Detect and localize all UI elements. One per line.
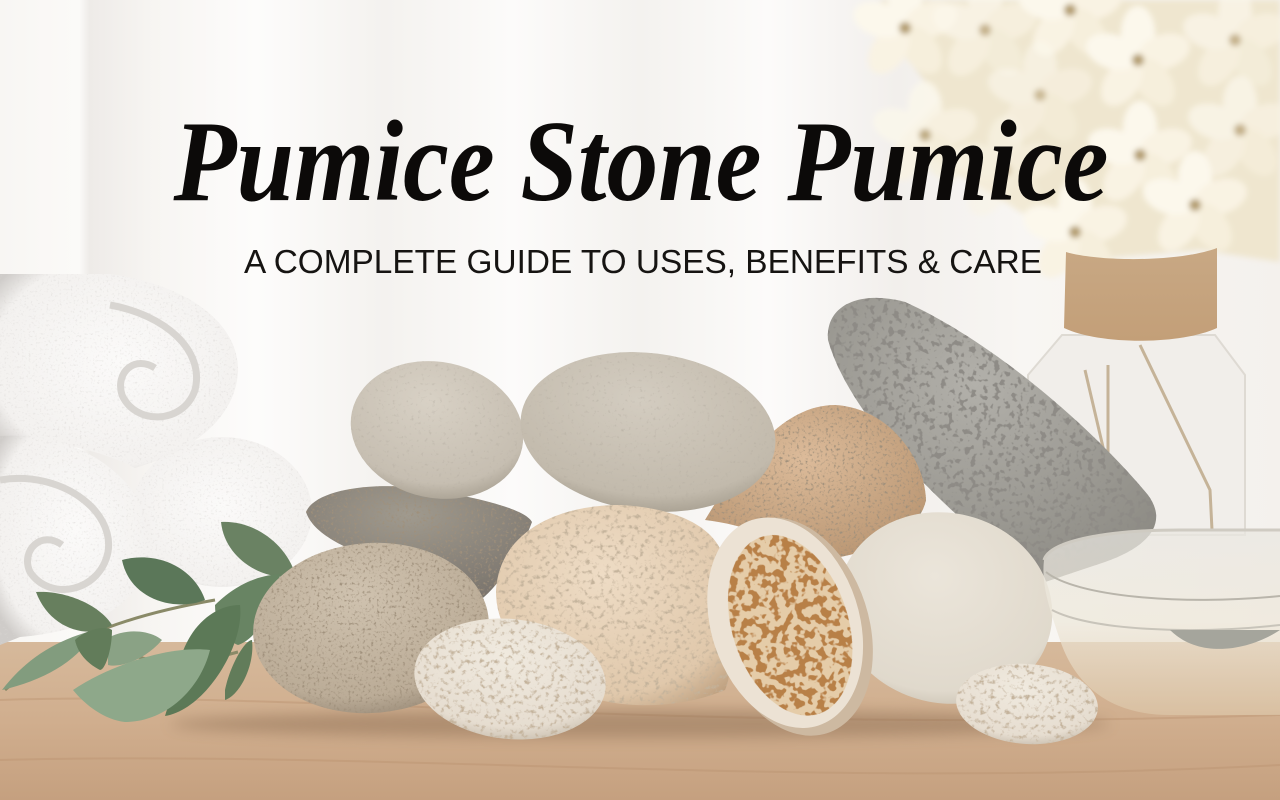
stone: small pebble right: [953, 659, 1101, 749]
title: Pumice Stone Pumice: [173, 98, 1109, 226]
stone: white round right: [817, 490, 1073, 726]
stone: tan round back: [705, 405, 926, 558]
shadow under stones: [170, 710, 1110, 738]
eucalyptus sprig: [2, 522, 296, 722]
glass jar with cork: [1028, 248, 1245, 535]
wooden table: [0, 642, 1280, 800]
towel roll: top: [0, 274, 238, 468]
towel roll: back right: [132, 437, 312, 587]
stone: pumice slice with holes: [681, 495, 900, 758]
glass bowl of water: [1043, 530, 1280, 715]
stone: dark flat: [306, 486, 532, 600]
stone: small white front: [408, 609, 612, 749]
stone: big grey top: [511, 338, 785, 526]
stone: grey egg top left: [338, 345, 536, 515]
subtitle: A COMPLETE GUIDE TO USES, BENEFITS & CARE: [244, 243, 1042, 280]
towels: [0, 274, 312, 645]
pumice stones: [247, 298, 1156, 758]
flower bouquet: [848, 0, 1280, 286]
stone: long dark pumice: [828, 298, 1156, 582]
towel roll: bottom left: [0, 436, 152, 645]
stone: large tan center: [496, 505, 730, 705]
stone: speckled left: [247, 535, 495, 721]
